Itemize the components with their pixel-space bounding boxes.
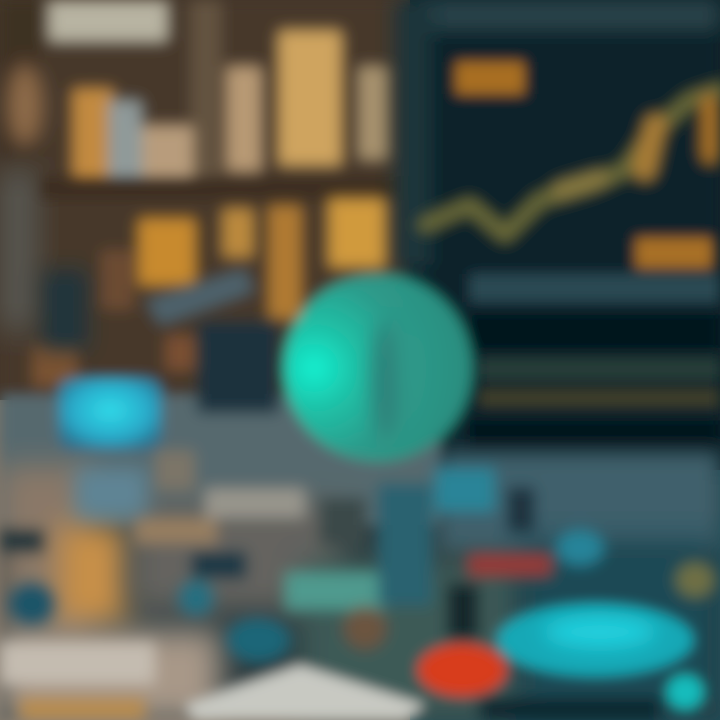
icon: glowing blue screen	[58, 378, 162, 518]
lower shelf books	[32, 198, 386, 387]
white paper sheets	[185, 665, 425, 720]
orange label lower	[636, 238, 712, 268]
icon: red object	[418, 644, 506, 696]
panel: desk objects	[0, 450, 715, 720]
line chart	[425, 90, 720, 235]
icon: glowing cyan tray	[497, 604, 693, 676]
icon: teal globe	[284, 274, 472, 462]
data bands	[470, 274, 720, 302]
panel: dark finance screen	[395, 0, 720, 480]
orange label top	[456, 62, 524, 94]
panel: desk surface	[0, 395, 720, 720]
panel: bookshelves background	[0, 0, 420, 400]
icon: microscope-like dark object	[145, 268, 278, 412]
shelf divider	[40, 176, 400, 200]
upper shelf books	[48, 0, 388, 193]
dark shelf objects	[42, 270, 88, 350]
